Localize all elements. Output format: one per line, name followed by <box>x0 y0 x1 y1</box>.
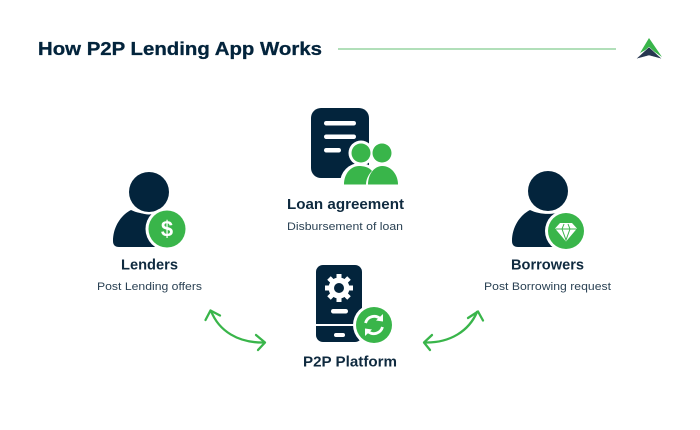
title: How P2P Lending App Works <box>38 38 322 59</box>
heading: lenders: Lenders <box>121 258 178 274</box>
text: disbursement of loan: Disbursement of loan <box>287 221 403 233</box>
heading: borrowers: Borrowers <box>511 258 584 274</box>
icon: lender with dollar badge: $ <box>161 216 173 242</box>
icon: lender with dollar badge <box>113 170 188 250</box>
text: post lending offers: Post Lending offers <box>97 281 203 293</box>
icon: phone with gear and sync badge <box>316 265 395 346</box>
arrow: borrowers to platform <box>424 312 483 350</box>
arrow: lenders to platform <box>206 310 265 350</box>
text: post borrowing request: Post Borrowing request <box>484 281 611 293</box>
icon: borrower with diamond badge <box>512 168 587 252</box>
heading: p2p platform: P2P Platform <box>303 354 397 370</box>
icon: logo <box>636 38 662 59</box>
heading: loan agreement: Loan agreement <box>287 197 404 213</box>
icon: loan agreement <box>311 108 398 186</box>
